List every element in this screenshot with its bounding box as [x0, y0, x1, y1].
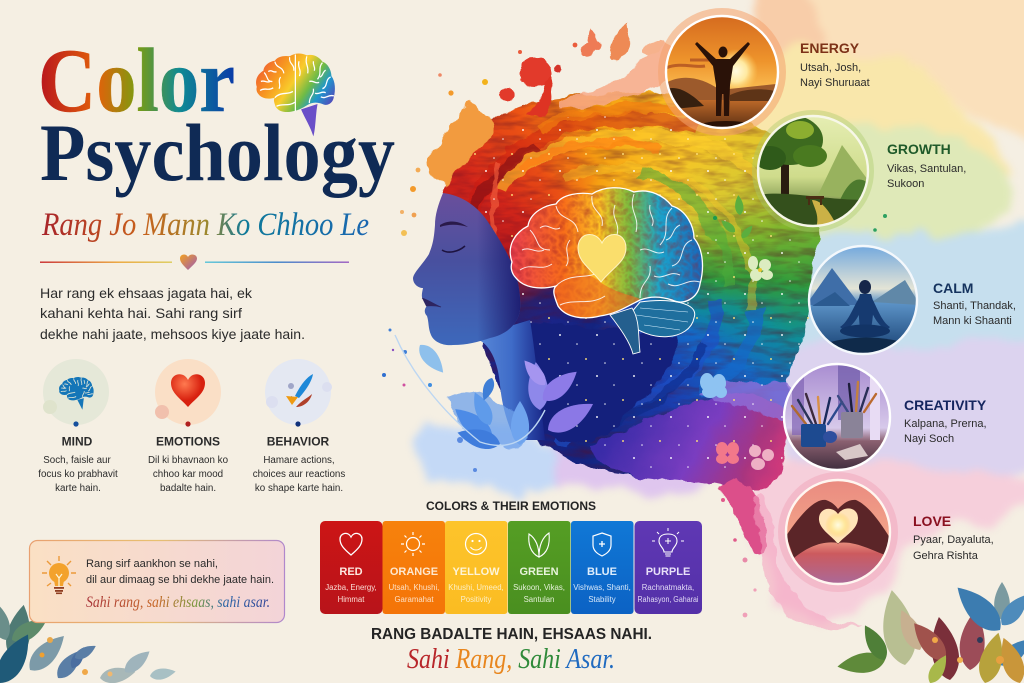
navy hair under brain: [520, 320, 680, 441]
card: yellow: [445, 521, 508, 614]
label: creativity: [904, 397, 987, 445]
label: creativity: CREATIVITY: [904, 397, 987, 413]
hair rainbow mass: [442, 90, 821, 478]
flowers in hair: [700, 195, 774, 470]
photo: love: [778, 472, 898, 592]
card: orange: ORANGE: [390, 566, 438, 578]
callout: Rang sirf aankhon se nahi,: [86, 558, 218, 570]
title: Psychology: [40, 107, 395, 198]
foliage bottom right: [836, 579, 1024, 683]
panel: mind: MIND: [62, 434, 93, 448]
card: blue: Stability: [588, 595, 616, 604]
label: energy: Utsah, Josh,: [800, 62, 861, 74]
label: calm: Mann ki Shaanti: [933, 315, 1012, 327]
woman's face profile: [413, 193, 520, 345]
foliage bottom left: [0, 596, 177, 683]
card: red: [320, 521, 382, 614]
panel: emotions: badalte hain.: [160, 483, 216, 494]
label: growth: Vikas, Santulan,: [887, 163, 966, 175]
panel: mind: karte hain.: [55, 483, 101, 494]
icon: light bulb: [42, 556, 76, 594]
woman's neck: [470, 320, 545, 440]
heart in brain: [578, 234, 626, 282]
callout: [30, 540, 284, 622]
card: green: [508, 521, 570, 614]
central brain: [510, 188, 702, 354]
card: red: Himmat: [338, 595, 365, 604]
intro paragraph: Har rang ek ehsaas jagata hai, ek: [40, 285, 253, 301]
card: yellow: YELLOW: [452, 566, 500, 578]
speckle overlay: [470, 116, 810, 470]
card: orange: Utsah, Khushi,: [389, 583, 439, 592]
icon: rainbow brain: [256, 53, 335, 136]
card: green: GREEN: [519, 566, 559, 578]
tagline: Rang Jo Mann Ko Chhoo Le: [41, 207, 369, 243]
label: growth: [887, 141, 966, 190]
photo: energy: [658, 8, 786, 136]
label: love: Pyaar, Dayaluta,: [913, 534, 994, 546]
card: orange: Garamahat: [394, 595, 434, 604]
panel: mind: Soch, faisle aur: [43, 455, 111, 466]
card: red: RED: [339, 566, 363, 578]
label: love: Gehra Rishta: [913, 550, 979, 562]
card: green: Santulan: [524, 595, 554, 604]
title: Color: [38, 30, 235, 131]
callout: dil aur dimaag se bhi dekhe jaate hain.: [86, 574, 274, 586]
card: orange: [382, 521, 445, 614]
label: love: [913, 513, 994, 562]
panel: emotions: EMOTIONS: [156, 434, 220, 448]
panel: mind: focus ko prabhavit: [38, 469, 118, 480]
panel: behavior: ko shape karte hain.: [255, 483, 343, 494]
hair streak texture: [463, 108, 770, 445]
callout: Sahi rang, sahi ehsaas, sahi asar.: [86, 594, 270, 611]
card: purple: Rahasyon, Gaharai: [638, 595, 699, 604]
intro paragraph: dekhe nahi jaate, mehsoos kiye jaate hain.: [40, 326, 305, 342]
label: calm: [933, 280, 1016, 327]
closing line: RANG BADALTE HAIN, EHSAAS NAHI.: [371, 626, 652, 643]
panel: emotions: [148, 359, 229, 494]
card: purple: PURPLE: [646, 566, 690, 578]
card: blue: BLUE: [587, 566, 617, 578]
panel: behavior: choices aur reactions: [253, 469, 345, 480]
card: blue: Vishwas, Shanti,: [573, 583, 631, 592]
panel: emotions: chhoo kar mood: [153, 469, 223, 480]
label: love: LOVE: [913, 513, 951, 529]
closing script: Sahi Rang, Sahi Asar.: [407, 643, 615, 675]
floral ornament top: [560, 20, 690, 110]
card: purple: [634, 521, 702, 614]
label: creativity: Nayi Soch: [904, 433, 954, 445]
title: [38, 30, 395, 198]
card: green: Sukoon, Vikas,: [513, 583, 565, 592]
label: energy: [800, 40, 870, 89]
card: red: Jazba, Energy,: [325, 583, 377, 592]
card: yellow: Positivity: [461, 595, 491, 604]
label: creativity: Kalpana, Prerna,: [904, 418, 987, 430]
card: blue: [571, 521, 634, 614]
photo: creativity: [782, 362, 892, 472]
label: energy: ENERGY: [800, 40, 860, 56]
photo: growth: [752, 110, 874, 232]
panel: behavior: BEHAVIOR: [267, 434, 330, 448]
label: energy: Nayi Shuruaat: [800, 77, 870, 89]
photo: calm: [806, 244, 920, 360]
splash: orange behind head: [430, 57, 564, 190]
divider with heart: [40, 254, 349, 270]
card: yellow: Khushi, Umeed,: [448, 583, 504, 592]
heading: colors and emotions: COLORS & THEIR EMOTIONS: [426, 499, 596, 513]
purple and magenta hair band: [590, 379, 860, 630]
intro paragraph: [40, 285, 305, 342]
label: calm: CALM: [933, 280, 973, 296]
label: calm: Shanti, Thandak,: [933, 300, 1016, 312]
panel: emotions: Dil ki bhavnaon ko: [148, 455, 229, 466]
intro paragraph: kahani kehta hai. Sahi rang sirf: [40, 305, 242, 321]
color splatter dots: [382, 43, 887, 617]
label: growth: GROWTH: [887, 141, 951, 157]
panel: behavior: Hamare actions,: [263, 455, 335, 466]
card: purple: Rachnatmakta,: [642, 583, 694, 592]
label: growth: Sukoon: [887, 178, 924, 190]
panel: mind: [38, 359, 118, 494]
neck and shoulder leaves: [395, 335, 598, 453]
panel: behavior: [253, 359, 345, 494]
